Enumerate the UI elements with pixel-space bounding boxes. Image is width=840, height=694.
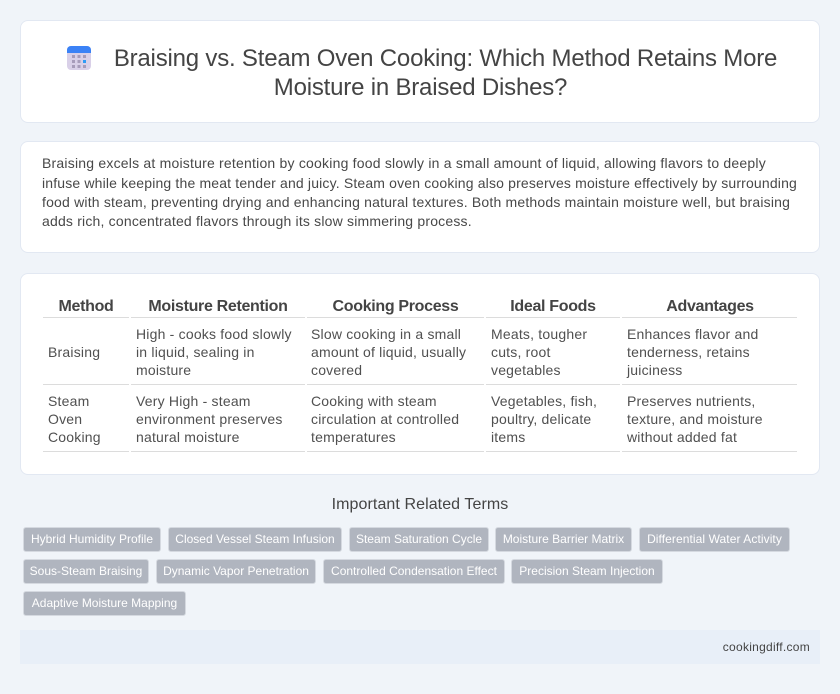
table row: steam oven cooking: Preserves nutrients, [627, 393, 756, 409]
table row: braising: Braising [48, 344, 100, 360]
tag group: related terms: Moisture Barrier Matrix [503, 532, 624, 546]
tag group: related terms: Hybrid Humidity Profile [31, 532, 153, 546]
table header: Cooking Process [333, 298, 458, 315]
tag group: related terms: Dynamic Vapor Penetration [163, 564, 309, 578]
table row: steam oven cooking: natural moisture [136, 429, 240, 445]
table row: steam oven cooking: temperatures [311, 429, 396, 445]
table row: steam oven cooking: Cooking [48, 429, 101, 445]
table row: braising: vegetables [491, 362, 561, 378]
table row: steam oven cooking: Oven [48, 411, 82, 427]
table header [59, 298, 754, 315]
table row: steam oven cooking: without added fat [627, 429, 737, 445]
summary text: Braising excels at moisture retention by cooking food slowly in a small amount of liquid, allowing flavors to deeply [42, 155, 766, 171]
summary text: food with steam, preventing drying and enhancing natural textures. Both methods maintain moisture well, but braising [42, 194, 790, 210]
tag group: related terms: Adaptive Moisture Mapping [32, 596, 177, 610]
table header: Method [59, 298, 113, 315]
table header: Advantages [666, 298, 754, 315]
tag group: related terms [23, 527, 790, 616]
table row: steam oven cooking: Cooking with steam [311, 393, 437, 409]
table row: braising: moisture [136, 362, 191, 378]
tag group: related terms: Closed Vessel Steam Infusion [175, 532, 335, 546]
footer [20, 630, 820, 664]
tag group: related terms: Steam Saturation Cycle [356, 532, 482, 546]
panel: summary [20, 141, 820, 253]
table row: steam oven cooking: poultry, delicate [491, 411, 591, 427]
table row: steam oven cooking: items [491, 429, 525, 445]
table row: steam oven cooking [48, 393, 763, 445]
table row: braising: Slow cooking in a small [311, 326, 461, 342]
tag group: related terms: Sous-Steam Braising [30, 564, 142, 578]
panel: title header [20, 20, 820, 123]
heading: important related terms: Important Related Terms [332, 496, 508, 513]
table row: steam oven cooking: Very High - steam [136, 393, 251, 409]
table row: braising: Meats, tougher [491, 326, 587, 342]
table row: braising: tenderness, retains [627, 344, 750, 360]
title [114, 45, 777, 101]
title: Moisture in Braised Dishes? [274, 74, 567, 101]
footer domain: cookingdiff.com [723, 640, 810, 654]
table row: braising: juiciness [627, 362, 682, 378]
summary text: infuse while keeping the meat tender and juicy. Steam oven cooking also preserves moisture effectively by surrounding [42, 175, 797, 191]
summary text: adds rich, concentrated flavors through its slow simmering process. [42, 213, 472, 229]
tag group: related terms: Controlled Condensation Effect [331, 564, 497, 578]
table header: Moisture Retention [148, 298, 288, 315]
table row: braising: cuts, root [491, 344, 551, 360]
table row: braising: in liquid, sealing in [136, 344, 255, 360]
table header: Ideal Foods [510, 298, 596, 315]
panel: comparison table [20, 273, 820, 475]
title: Braising vs. Steam Oven Cooking: Which Method Retains More [114, 45, 777, 72]
table row: braising: Enhances flavor and [627, 326, 758, 342]
table row: steam oven cooking: Steam [48, 393, 89, 409]
tag group: related terms: Differential Water Activity [647, 532, 782, 546]
table row: braising: amount of liquid, usually [311, 344, 466, 360]
table row: steam oven cooking: Vegetables, fish, [491, 393, 597, 409]
table row: steam oven cooking: texture, and moisture [627, 411, 763, 427]
table row: braising: covered [311, 362, 362, 378]
table row: braising: High - cooks food slowly [136, 326, 292, 342]
table row: steam oven cooking: circulation at controlled [311, 411, 459, 427]
summary text [42, 155, 797, 229]
tag group: related terms: Precision Steam Injection [519, 564, 655, 578]
table row: steam oven cooking: environment preserves [136, 411, 283, 427]
table row: braising [48, 326, 758, 378]
icon: calendar [67, 46, 91, 70]
